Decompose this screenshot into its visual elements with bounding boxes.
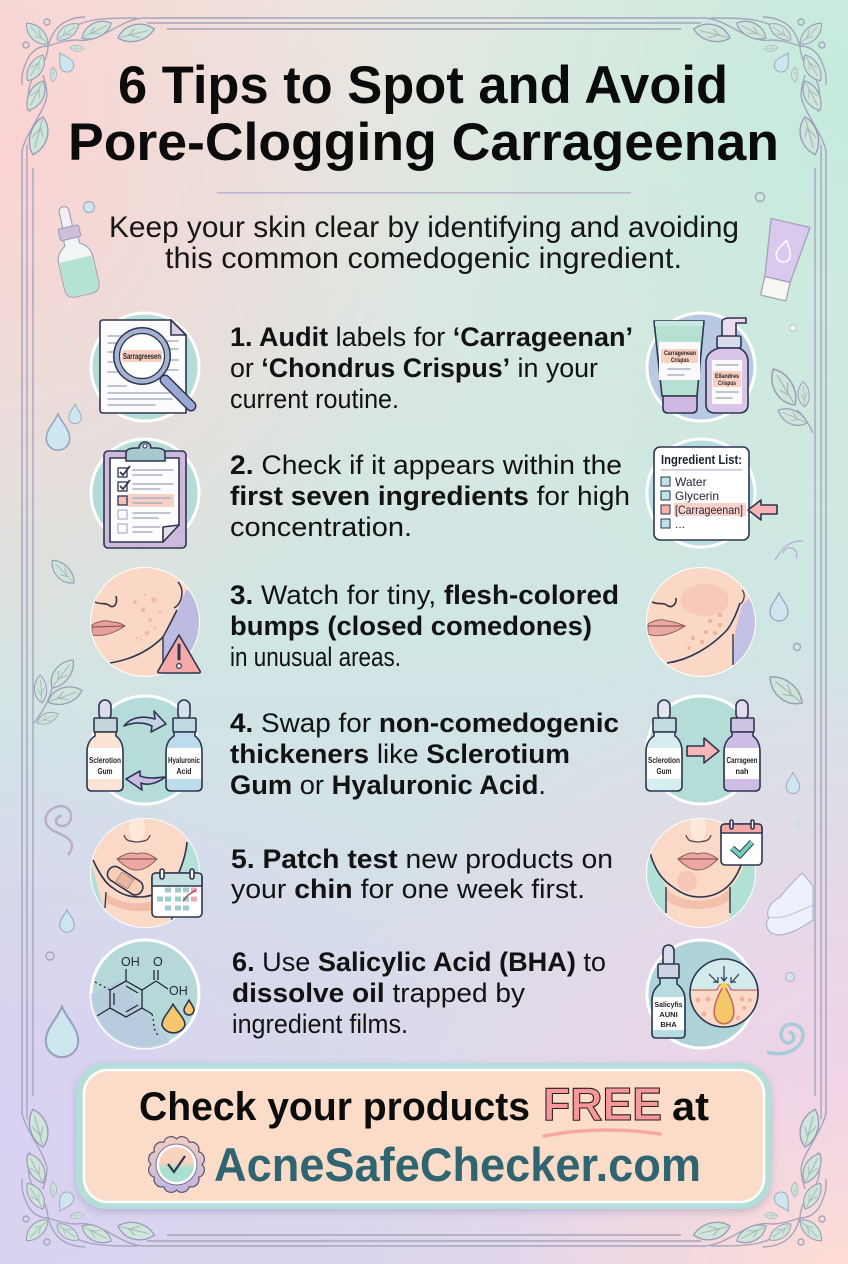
- tip 3: [90, 565, 758, 680]
- subtitle: [109, 211, 739, 275]
- tip 4: [87, 696, 760, 804]
- bottle: Hyaluronic Acid: [166, 700, 202, 791]
- tip 5 text: your chin for one week first.: [231, 874, 585, 904]
- tip 6 text: dissolve oil trapped by: [232, 978, 526, 1008]
- tip 1 text: current routine.: [230, 384, 399, 414]
- icon: cream tube: [754, 218, 810, 302]
- icon: replace bottle: [646, 696, 760, 804]
- tip 4 text: thickeners like Sclerotium: [230, 739, 570, 769]
- bottle: Sclerotium Gum: [646, 700, 682, 791]
- tip 6 text: ingredient films.: [232, 1009, 408, 1039]
- tip 3 text: [230, 580, 619, 672]
- tip 4 text: Gum or Hyaluronic Acid.: [230, 770, 546, 800]
- bottle: Salicylic Acid BHA: Salicyfis: [654, 1000, 682, 1009]
- tip 2: [91, 439, 777, 548]
- tip 5 text: 5. Patch test new products on: [231, 844, 613, 874]
- call to action headline: [139, 1078, 709, 1130]
- icon: tube and pump bottle: Crispus: [671, 358, 690, 364]
- icon: chin with calendar check: [645, 814, 762, 930]
- corner vine bottom right: [692, 1107, 827, 1248]
- icon: ingredient list card: Glycerin: [675, 489, 719, 503]
- call to action headline: FREE: [543, 1078, 662, 1130]
- corner vine top left: [21, 16, 156, 157]
- icon: pore cross-section: [690, 959, 758, 1030]
- icon: calendar with check: [721, 820, 762, 865]
- tip 5 text: [231, 844, 613, 904]
- icon: magnifying glass over label: Sarragreesen: [123, 352, 161, 361]
- corner vine bottom left: [21, 1107, 156, 1248]
- icon: verified badge: [149, 1137, 204, 1192]
- tip 1 text: 1. Audit labels for ‘Carrageenan’: [230, 322, 633, 352]
- bottle: Sclerotium Gum: [87, 700, 123, 791]
- tip 4 text: [230, 708, 619, 800]
- icon: ingredient list card: [647, 439, 777, 547]
- tip 4 text: 4. Swap for non-comedogenic: [230, 708, 619, 738]
- divider: [217, 192, 631, 194]
- icon: tube and pump bottle: [647, 313, 755, 421]
- icon: pink arrow: [687, 738, 719, 763]
- underline: [544, 1130, 660, 1136]
- icon: clipboard checklist: [91, 439, 199, 548]
- tip 3 text: 3. Watch for tiny, flesh-colored: [230, 580, 619, 610]
- icon: face with jawline bumps: [645, 565, 758, 680]
- icon: face with bumps and warning: [90, 565, 205, 680]
- tip 2 text: 2. Check if it appears within the: [230, 450, 622, 480]
- icon: oil drops: [162, 1004, 185, 1033]
- icon: salicylic acid molecule: OH: [169, 984, 188, 998]
- bottle: Carrageenan: Carrageen: [726, 756, 758, 765]
- bottle: Carrageenan: nah: [736, 767, 749, 776]
- bottle: Carrageenan: [724, 700, 760, 791]
- website name: AcneSafeChecker.com: [214, 1138, 701, 1191]
- bottle: Hyaluronic Acid: Acid: [176, 767, 192, 776]
- icon: tube and pump bottle: Ellandres: [715, 374, 740, 380]
- call to action headline: at: [672, 1085, 709, 1129]
- tip 2 text: concentration.: [230, 512, 412, 542]
- bottle: Sclerotium Gum: Gum: [656, 767, 672, 776]
- icon: salicylic acid molecule: [91, 940, 199, 1048]
- bottle: Salicylic Acid BHA: [652, 945, 685, 1038]
- icon: BHA bottle and pore: [647, 940, 758, 1048]
- decorative droplets, leaves and swirls: [33, 192, 813, 1057]
- bottle: Salicylic Acid BHA: AUNI: [659, 1010, 678, 1019]
- icon: ingredient list card: [Carrageenan]: [675, 503, 743, 517]
- title: 6 Tips to Spot and Avoid: [118, 56, 728, 115]
- subtitle: Keep your skin clear by identifying and avoiding: [109, 211, 739, 244]
- bottle: Hyaluronic Acid: Hyaluronic: [168, 756, 200, 765]
- tip 1 text: [230, 322, 633, 414]
- title: Pore-Clogging Carrageenan: [68, 113, 779, 172]
- icon: tube and pump bottle: Carragenean: [664, 351, 696, 357]
- tip 6 text: [232, 947, 606, 1039]
- tip 6 text: 6. Use Salicylic Acid (BHA) to: [232, 947, 606, 977]
- icon: ingredient list card: Ingredient List:: [661, 452, 742, 467]
- bottle: Salicylic Acid BHA: BHA: [660, 1020, 677, 1029]
- tip 2 text: [230, 450, 630, 542]
- call to action headline: Check your products: [139, 1085, 530, 1129]
- bottle: Sclerotium Gum: Sclerotion: [648, 756, 680, 765]
- title: [68, 56, 779, 172]
- icon: salicylic acid molecule: OH: [121, 955, 140, 969]
- tip 1: [91, 313, 755, 421]
- tip 6: [91, 940, 758, 1048]
- icon: pink arrow: [748, 500, 777, 520]
- subtitle: this common comedogenic ingredient.: [165, 242, 682, 275]
- corner vine top right: [692, 16, 827, 157]
- icon: bandage: [105, 864, 146, 898]
- icon: ingredient list card: ...: [675, 517, 685, 531]
- icon: tube and pump bottle: Crispus: [718, 381, 737, 387]
- bottle: Sclerotium Gum: Gum: [98, 767, 112, 776]
- tip 5: [90, 814, 762, 930]
- icon: chin with bandage and calendar: [90, 814, 202, 930]
- call to action panel: [76, 1063, 771, 1209]
- bottle: Sclerotium Gum: Sclerotion: [89, 756, 121, 765]
- icon: swap bottles: [87, 696, 202, 804]
- tip 2 text: first seven ingredients for high: [230, 481, 630, 511]
- tip 3 text: in unusual areas.: [230, 642, 401, 672]
- icon: magnifying glass over label: [91, 313, 199, 421]
- icon: swap arrows: [124, 711, 166, 732]
- tip 1 text: or ‘Chondrus Crispus’ in your: [230, 353, 598, 383]
- icon: salicylic acid molecule: O: [153, 955, 163, 969]
- tip 3 text: bumps (closed comedones): [230, 611, 592, 641]
- icon: serum dropper bottle: [46, 202, 101, 299]
- icon: calendar: [152, 869, 202, 917]
- icon: ingredient list card: Water: [675, 475, 707, 489]
